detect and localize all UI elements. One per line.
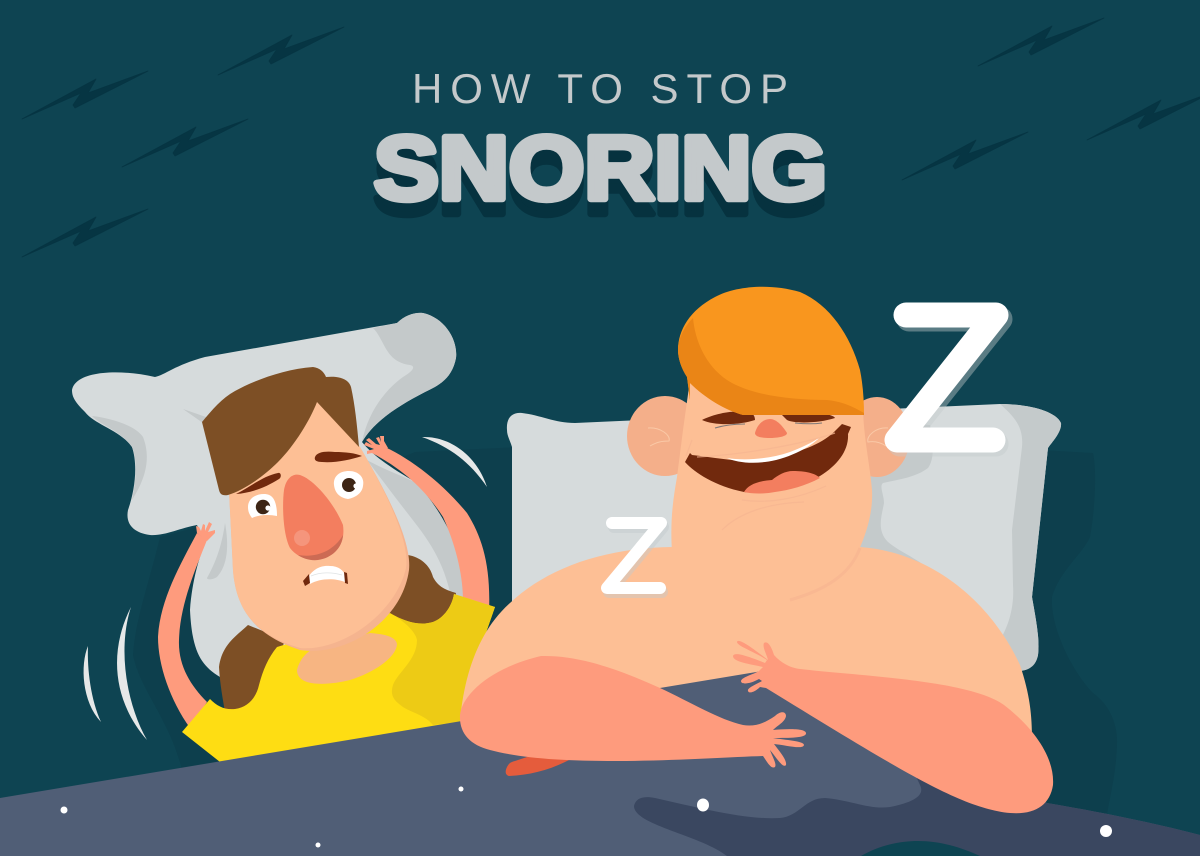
woman's yellow shirt xyxy=(182,594,495,762)
man's nose xyxy=(755,419,787,438)
blanket xyxy=(0,668,1200,856)
woman's face xyxy=(229,402,409,651)
woman's pillow xyxy=(72,313,468,677)
title: snoring: SNORING xyxy=(374,134,827,234)
man's head xyxy=(671,380,872,600)
man's mouth xyxy=(685,424,851,494)
woman's nose xyxy=(283,475,343,560)
woman's mouth xyxy=(303,566,348,586)
man's pillow xyxy=(507,404,1061,671)
man's left arm and hand xyxy=(460,656,806,768)
woman's eyes xyxy=(248,471,363,518)
woman's back hair xyxy=(219,550,456,712)
big z xyxy=(897,315,1000,444)
foot under arm xyxy=(506,755,569,776)
man's hair xyxy=(678,287,864,415)
man's torso xyxy=(460,547,1032,800)
woman's right arm and hand xyxy=(364,436,489,612)
blanket dots xyxy=(60,786,1112,848)
title: snoring: SNORING xyxy=(374,119,827,219)
small z xyxy=(607,523,663,592)
man's eyes xyxy=(702,412,835,424)
background shadows xyxy=(133,447,1117,815)
man's right arm and hand xyxy=(733,641,1053,813)
title: how to stop: HOW TO STOP xyxy=(412,65,788,112)
woman's left arm and hand xyxy=(158,522,215,728)
man's ears xyxy=(627,396,910,477)
woman's hair fringe xyxy=(202,367,359,495)
woman's motion arcs xyxy=(84,437,487,740)
man's chin creases xyxy=(686,433,835,530)
woman's eyebrows xyxy=(236,452,362,494)
background lightning bolts xyxy=(22,18,1200,257)
